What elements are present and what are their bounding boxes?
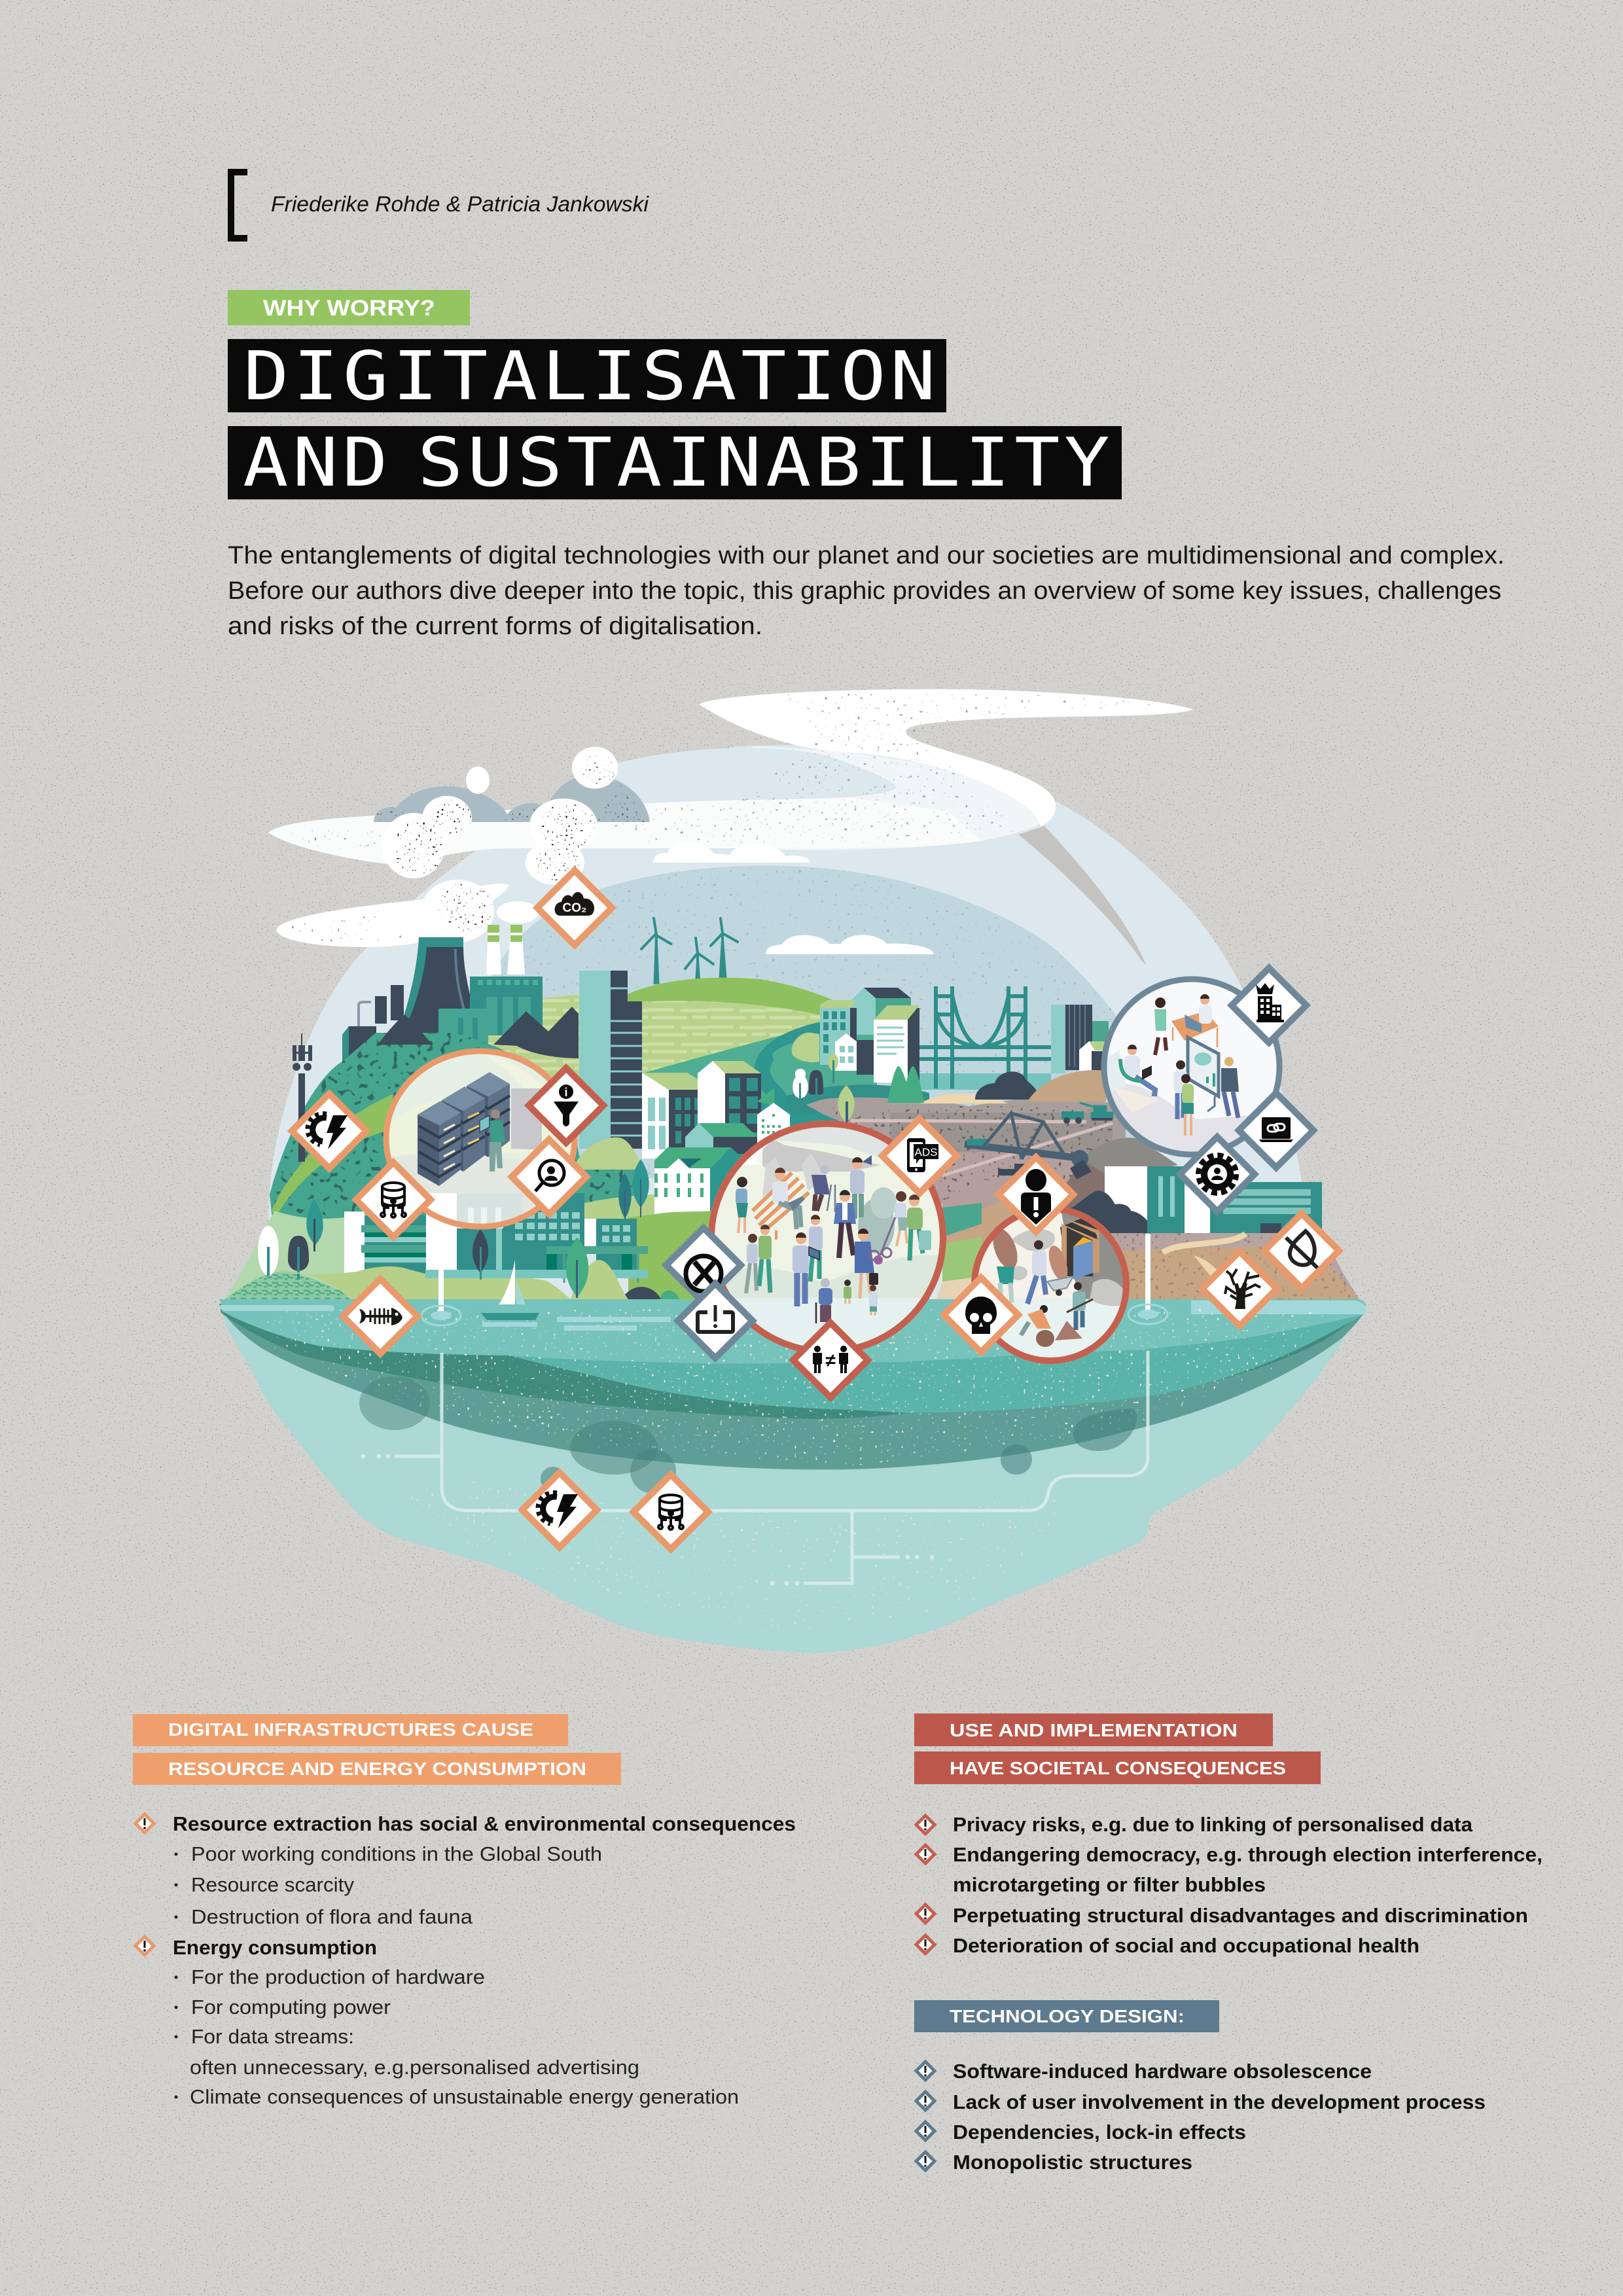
central city buildings xyxy=(642,1061,790,1299)
list text: Deterioration of social and occupational health xyxy=(953,1934,1419,1957)
title: AND xyxy=(243,423,392,501)
telecom mast xyxy=(293,1033,312,1162)
hazard: obsolescence battery xyxy=(678,1283,753,1358)
sky dome xyxy=(265,745,1323,1299)
sailing boat xyxy=(481,1260,539,1327)
heading tag: TECHNOLOGY DESIGN: xyxy=(950,2006,1185,2026)
wind turbines xyxy=(641,918,738,1001)
list text: Lack of user involvement in the development process xyxy=(953,2090,1486,2113)
list text: Perpetuating structural disadvantages and discrimination xyxy=(953,1904,1528,1927)
hazard: unrepairable xyxy=(666,1228,741,1302)
heading tag xyxy=(914,2000,1219,2032)
hazard: crossed leaf xyxy=(1264,1213,1339,1288)
kicker tag: WHY WORRY? xyxy=(263,296,435,321)
authors with bracket: Friederike Rohde & Patricia Jankowski xyxy=(271,192,650,216)
panel: digital infrastructures xyxy=(133,1714,796,2108)
hazard: skull xyxy=(944,1278,1018,1352)
hazard: lock-in link xyxy=(1239,1093,1313,1168)
hazard: dead tree xyxy=(1202,1251,1277,1326)
illustration: globe of land, water and sky xyxy=(219,689,1366,1653)
list text: Energy consumption xyxy=(173,1936,377,1959)
hazard: CO2 cloud: CO₂ xyxy=(563,901,586,915)
cloud swirls xyxy=(268,689,1193,947)
right-hand buildings and bridge xyxy=(792,986,1109,1090)
list text: Software-induced hardware obsolescence xyxy=(953,2060,1372,2083)
coal piles xyxy=(378,1007,579,1058)
hazard: database xyxy=(356,1162,431,1237)
intro paragraph: The entanglements of digital technologies with our planet and our societies are multidimensional and complex. xyxy=(228,542,1505,569)
hazard: CO2 cloud xyxy=(537,870,612,945)
hazard in water: database xyxy=(633,1475,708,1549)
olive foreground band xyxy=(275,1260,679,1299)
grey clouds xyxy=(374,775,650,822)
list text: Resource scarcity xyxy=(191,1873,354,1896)
hazard: targeted ads xyxy=(882,1119,957,1193)
alert markers xyxy=(916,1816,935,1954)
title xyxy=(228,336,1122,501)
list text: Climate consequences of unsustainable energy generation xyxy=(190,2085,739,2108)
list text: For computing power xyxy=(191,1996,391,2018)
bench xyxy=(753,1173,809,1240)
hazard: information filter: i xyxy=(564,1086,568,1099)
authors with bracket xyxy=(231,172,650,238)
smoke puffs xyxy=(380,747,618,942)
list text: Privacy risks, e.g. due to linking of personalised data xyxy=(953,1813,1473,1836)
small trees on the left xyxy=(258,1199,323,1280)
list text: Destruction of flora and fauna xyxy=(191,1905,473,1928)
heading tag: HAVE SOCIETAL CONSEQUENCES xyxy=(950,1758,1286,1778)
data cable lines xyxy=(363,1351,1148,1583)
title: DIGITALISATION xyxy=(243,336,940,415)
intro paragraph xyxy=(228,542,1505,640)
hazard: energy gear xyxy=(292,1094,366,1168)
pale fields and textured mound on the left xyxy=(219,1211,366,1306)
small white clouds xyxy=(653,842,934,954)
circle: office xyxy=(1101,977,1283,1158)
fields and hills behind the city xyxy=(488,978,929,1299)
circle: mining xyxy=(971,1204,1130,1367)
intro paragraph: Before our authors dive deeper into the topic, this graphic provides an overview of some key issues, challenges xyxy=(228,577,1501,605)
alert markers xyxy=(916,2062,935,2170)
list text: Resource extraction has social & environmental consequences xyxy=(173,1812,796,1835)
bucket-wheel excavator xyxy=(965,1103,1113,1179)
heading tag xyxy=(133,1714,621,1785)
hazard in water: energy gear xyxy=(522,1473,597,1547)
hazard: personal risk xyxy=(999,1157,1073,1232)
alert markers xyxy=(135,1814,154,1955)
heading tag: USE AND IMPLEMENTATION xyxy=(950,1720,1238,1740)
panel: use and implementation xyxy=(914,1713,1543,1957)
kicker tag xyxy=(228,290,470,325)
server racks xyxy=(418,1072,510,1186)
heading tag: RESOURCE AND ENERGY CONSUMPTION xyxy=(168,1759,586,1779)
list text: For the production of hardware xyxy=(191,1965,485,1988)
crowd of people xyxy=(736,1155,931,1323)
list text: microtargeting or filter bubbles xyxy=(953,1873,1266,1896)
intro paragraph: and risks of the current forms of digitalisation. xyxy=(228,613,762,640)
olive bushes and lawn xyxy=(573,1138,717,1299)
list text xyxy=(173,1812,796,2108)
list text: Monopolistic structures xyxy=(953,2151,1192,2174)
heading tag xyxy=(914,1713,1321,1784)
hazard: information filter xyxy=(529,1068,603,1143)
hazard: surveillance search xyxy=(512,1139,586,1214)
hazard: dead fish xyxy=(343,1279,418,1354)
hazard: inequality xyxy=(793,1323,868,1397)
list text: Dependencies, lock-in effects xyxy=(953,2121,1246,2144)
water body xyxy=(219,1299,1366,1653)
list text: For data streams: xyxy=(191,2025,354,2048)
miners and rocks xyxy=(988,1225,1093,1347)
lower left buildings xyxy=(344,1193,661,1299)
water pumps xyxy=(421,1234,1168,1325)
main green hill xyxy=(270,1033,589,1244)
high-rise tower xyxy=(579,971,642,1149)
list text: Poor working conditions in the Global South xyxy=(191,1842,602,1865)
power plant xyxy=(342,925,543,1062)
circle: society xyxy=(708,1113,946,1357)
list text: Endangering democracy, e.g. through election interference, xyxy=(953,1843,1543,1866)
panel: technology design xyxy=(914,2000,1486,2174)
leaf trees xyxy=(473,1054,924,1298)
circle: data centre xyxy=(383,1049,577,1232)
title: SUSTAINABILITY xyxy=(418,423,1114,501)
list text xyxy=(953,1813,1543,1957)
technician xyxy=(480,1109,505,1172)
quarry landscape xyxy=(806,1070,1178,1302)
factory on the right xyxy=(1068,1166,1360,1300)
heading tag: DIGITAL INFRASTRUCTURES CAUSE xyxy=(168,1719,533,1740)
hazard: monopoly building xyxy=(1232,968,1306,1043)
hazard: inequality: ≠ xyxy=(825,1350,836,1371)
list text xyxy=(953,2060,1486,2174)
hazard: user involvement gear xyxy=(1180,1137,1255,1211)
hazard: targeted ads: ADS xyxy=(915,1146,937,1158)
office workers and board xyxy=(1120,994,1239,1136)
list text: often unnecessary, e.g.personalised advertising xyxy=(190,2056,639,2079)
